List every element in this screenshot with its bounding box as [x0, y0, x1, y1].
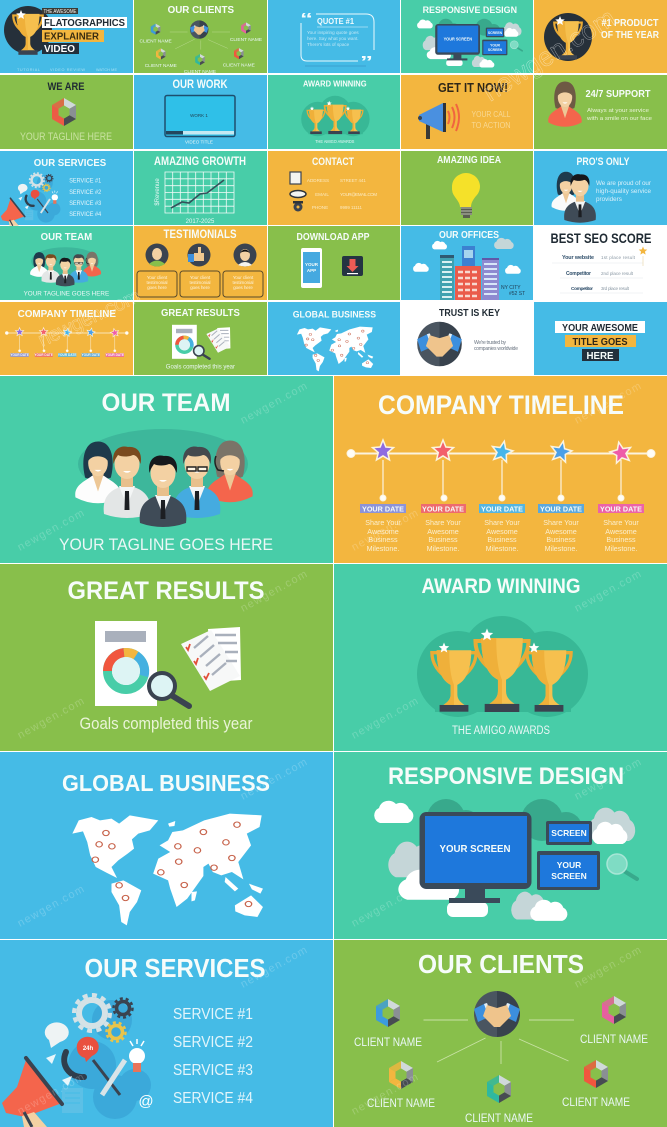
panel: responsive design small: YOUR SCREEN — [444, 36, 472, 41]
values — [340, 178, 377, 210]
values: YOUR@EMAIL.COM — [340, 192, 377, 197]
text: We're trusted by — [474, 340, 506, 346]
testimonial text: Your client — [233, 275, 254, 280]
icon: bulb — [452, 173, 480, 218]
panel: company timeline small — [0, 302, 133, 375]
milestone text: Awesome — [367, 527, 399, 536]
text: high-quality service — [596, 188, 651, 195]
panel: our team — [0, 376, 333, 563]
heading: stacked title labels: VIDEO — [44, 44, 75, 55]
panel: company timeline small: YOUR DATE — [58, 353, 76, 357]
heading: stacked title labels: THE AWESOME — [44, 9, 77, 15]
panel: award winning small: THE AMIGO AWARDS — [315, 139, 354, 144]
results table: 2nd place result — [601, 271, 634, 276]
panel: great results small: GREAT RESULTS — [161, 308, 240, 319]
text: menu captions: VIDEO REVIEW — [50, 68, 85, 72]
address — [501, 285, 525, 297]
label: line one: YOUR AWESOME — [562, 323, 638, 334]
quote marks: “ — [300, 11, 313, 28]
watermarks: newgen.com — [239, 756, 309, 803]
watermarks: newgen.com — [239, 380, 309, 427]
milestone text: Awesome — [545, 527, 577, 536]
heading: AMAZING IDEA — [437, 154, 501, 166]
panel: great results — [0, 564, 333, 751]
illustration: megaphone and tools: @ — [138, 1093, 154, 1110]
milestone text: Business — [487, 535, 517, 544]
panel: responsive design small: SCREEN — [488, 31, 503, 35]
icon: megaphone — [418, 103, 459, 139]
client network diagram — [376, 991, 626, 1103]
closing quote marks: ” — [360, 54, 373, 71]
heading: stacked title labels — [42, 8, 127, 55]
results table: 3rd place result — [601, 286, 630, 291]
panel: our clients — [334, 940, 667, 1127]
world map with pins — [72, 814, 263, 925]
values: STREET 441 — [340, 178, 366, 183]
watermarks: newgen.com — [477, 2, 620, 107]
heading: 24/7 SUPPORT — [586, 88, 651, 100]
caption: VIDEO TITLE — [185, 140, 213, 144]
panel: our services small: SERVICE #1 — [69, 178, 102, 185]
icon: trophy — [544, 13, 592, 61]
heading: GLOBAL BUSINESS — [62, 770, 270, 796]
panel: company timeline — [334, 376, 667, 563]
heading: #1 PRODUCT — [602, 17, 659, 29]
axis label: $Revenue — [155, 178, 161, 206]
milestone text: Milestone. — [605, 544, 637, 553]
text: We are proud of our — [596, 180, 651, 187]
panel: responsive design small: RESPONSIVE DESIGN — [423, 5, 517, 16]
date labels — [362, 504, 642, 514]
panel: our team small: OUR TEAM — [41, 232, 92, 243]
label: line two: TITLE GOES — [572, 337, 628, 348]
illustration: megaphone and tools — [2, 995, 154, 1127]
watermarks: newgen.com — [239, 944, 309, 991]
video frame: WORK 1 — [190, 113, 208, 118]
testimonial text: goes here — [147, 285, 167, 290]
panel: your awesome title — [534, 302, 667, 375]
heading — [601, 17, 659, 41]
caption: Goals completed this year — [80, 714, 253, 733]
milestone text: Share Your — [543, 518, 579, 527]
panel: company timeline small: YOUR DATE — [106, 353, 124, 357]
client names: CLIENT NAME — [562, 1095, 630, 1109]
testimonial text: testimonial — [232, 280, 254, 285]
panel: support — [534, 75, 667, 149]
panel: pros only — [534, 151, 667, 225]
text: quote body — [307, 30, 359, 47]
milestone text: Milestone. — [427, 544, 459, 553]
text: quote body: There's lots of space — [307, 42, 350, 47]
heading: OUR SERVICES — [84, 953, 266, 983]
panel: we are — [0, 75, 133, 149]
heading: OUR TEAM — [102, 389, 230, 417]
testimonial text: goes here — [190, 285, 210, 290]
screen labels — [440, 828, 587, 881]
panel: great results small: Goals completed this year — [166, 363, 236, 370]
panel: award winning — [334, 564, 667, 751]
heading: GREAT RESULTS — [68, 577, 264, 605]
icon: two people — [552, 172, 596, 223]
heading: DOWNLOAD APP — [296, 231, 370, 243]
milestone text: Milestone. — [486, 544, 518, 553]
watermarks: newgen.com — [573, 568, 643, 615]
panel: award winning small — [268, 75, 400, 149]
results table: Competitor — [571, 286, 593, 292]
panel: responsive design small: SCREEN — [488, 48, 503, 52]
text: quote body: Your inspiring quote goes — [307, 30, 359, 35]
values: 9999 11111 — [340, 205, 362, 210]
milestone text: Awesome — [486, 527, 518, 536]
panel: trust is key — [401, 302, 533, 375]
line chart — [165, 172, 234, 213]
heading: PRO'S ONLY — [576, 156, 630, 168]
heading: TRUST IS KEY — [439, 307, 500, 319]
illustration: screens and clouds — [374, 799, 637, 921]
panel: award winning small: AWARD WINNING — [303, 79, 367, 89]
panel: download app — [268, 226, 400, 300]
panel: our clients small: OUR CLIENTS — [168, 5, 234, 16]
testimonial boxes — [137, 271, 263, 297]
heading: OUR OFFICES — [439, 229, 499, 241]
client names: CLIENT NAME — [367, 1096, 435, 1110]
heading: TESTIMONIALS — [164, 229, 237, 241]
panel: our services small: SERVICE #2 — [69, 189, 102, 196]
text — [474, 340, 518, 352]
timeline — [347, 439, 655, 513]
testimonial text: Your client — [147, 275, 168, 280]
illustration: megaphone and tools: 24h — [83, 1046, 94, 1052]
icon: phone — [301, 248, 322, 288]
icon: download app — [342, 256, 363, 276]
milestone text: Share Your — [603, 518, 639, 527]
heading: stacked title labels: EXPLAINER — [44, 32, 100, 42]
results table — [552, 246, 647, 293]
illustration: report and magnifier — [95, 621, 241, 706]
illustration: city — [413, 238, 521, 300]
panel: our services — [0, 940, 333, 1127]
screen labels: SCREEN — [551, 871, 587, 881]
watermarks: newgen.com — [16, 1071, 86, 1118]
panel: contact — [268, 151, 400, 225]
heading: CONTACT — [312, 156, 354, 168]
date labels: YOUR DATE — [422, 504, 464, 514]
date labels: YOUR DATE — [481, 504, 523, 514]
results table: Competitor — [566, 271, 591, 277]
heading: AMAZING GROWTH — [154, 154, 246, 168]
panel: get it now — [401, 75, 533, 149]
service list: SERVICE #4 — [173, 1090, 253, 1107]
panel: our team small: YOUR TAGLINE GOES HERE — [24, 291, 110, 298]
date labels: YOUR DATE — [362, 504, 404, 514]
panel: our services small: SERVICE #4 — [69, 211, 102, 218]
icon: hexagon logo — [52, 98, 76, 126]
panel: our services small: OUR SERVICES — [34, 158, 106, 169]
heading: WE ARE — [48, 81, 84, 93]
client names: CLIENT NAME — [580, 1032, 648, 1046]
text: quote body: here. Say what you want. — [307, 36, 359, 41]
milestone text: Business — [428, 535, 458, 544]
panel: number one product — [534, 0, 667, 73]
heading: AWARD WINNING — [422, 575, 580, 598]
call to action text: YOUR CALL — [472, 109, 511, 119]
milestone text — [365, 518, 639, 553]
milestone text: Share Your — [425, 518, 461, 527]
text: menu captions: WATCH ME — [96, 68, 117, 72]
watermarks: newgen.com — [239, 568, 309, 615]
text — [586, 108, 652, 122]
panel: quote — [268, 0, 400, 73]
call to action text: TO ACTION — [472, 120, 510, 130]
call to action text — [472, 109, 511, 130]
icon: phone: APP — [307, 268, 316, 273]
testimonial text: testimonial — [146, 280, 168, 285]
milestone text: Business — [368, 535, 398, 544]
panel: amazing idea — [401, 151, 533, 225]
milestone text: Awesome — [427, 527, 459, 536]
labels — [307, 178, 329, 210]
screen labels: SCREEN — [551, 828, 587, 838]
text: providers — [596, 196, 622, 203]
heading: GET IT NOW! — [438, 81, 508, 95]
labels: PHONE — [312, 205, 328, 210]
watermarks: newgen.com — [350, 695, 420, 742]
testimonial text — [146, 275, 254, 290]
panel: amazing growth — [134, 151, 267, 225]
watermarks: newgen.com — [16, 883, 86, 930]
watermarks: newgen.com — [350, 507, 420, 554]
address: NY CITY — [501, 285, 521, 291]
milestone text: Share Your — [484, 518, 520, 527]
panel: company timeline small: YOUR DATE — [82, 353, 100, 357]
screen labels: YOUR — [557, 860, 581, 870]
panel: our clients small — [134, 0, 267, 75]
panel: responsive design small — [401, 0, 533, 73]
client names: CLIENT NAME — [354, 1035, 422, 1049]
watermarks: newgen.com — [350, 883, 420, 930]
milestone text: Business — [606, 535, 636, 544]
testimonial text: Your client — [190, 275, 211, 280]
text: menu captions: TUTORIAL — [17, 68, 40, 72]
panel: best seo score — [534, 226, 667, 300]
service list: SERVICE #2 — [173, 1034, 253, 1051]
illustration: team — [75, 429, 253, 527]
panel: our work — [134, 75, 267, 149]
panel: global business small — [268, 302, 400, 375]
icon: phone: YOUR — [305, 262, 319, 267]
icon: trophy on dark circle — [4, 6, 52, 55]
watermarks: newgen.com — [573, 756, 643, 803]
watermarks: newgen.com — [35, 285, 144, 352]
watermarks: newgen.com — [16, 507, 86, 554]
icons — [290, 172, 306, 212]
labels: EMAIL — [315, 192, 329, 197]
service list — [173, 1006, 253, 1107]
heading: COMPANY TIMELINE — [378, 390, 624, 420]
client names — [354, 1032, 648, 1125]
results table: Your website — [562, 255, 594, 261]
quote frame — [301, 14, 374, 61]
panel: great results small — [134, 302, 267, 375]
label: line three: HERE — [586, 351, 614, 362]
panel: our team small — [0, 226, 133, 300]
panel: company timeline small: YOUR DATE — [34, 353, 53, 357]
milestone text: Share Your — [365, 518, 401, 527]
text — [596, 180, 651, 203]
text: Always at your service — [587, 108, 649, 114]
date labels: YOUR DATE — [600, 504, 642, 514]
milestone text: Milestone. — [367, 544, 399, 553]
testimonial text: goes here — [233, 285, 253, 290]
panel: our clients small: CLIENT NAME — [230, 37, 262, 43]
panel: company timeline small: COMPANY TIMELINE — [18, 309, 116, 320]
icon: agent — [548, 81, 582, 127]
milestone text: Milestone. — [545, 544, 577, 553]
watermarks: newgen.com — [573, 380, 643, 427]
panel: our clients small: CLIENT NAME — [145, 63, 177, 69]
panel: our clients small: CLIENT NAME — [140, 38, 172, 44]
panel: flatographics explainer video — [0, 0, 133, 73]
service list: SERVICE #3 — [173, 1062, 253, 1079]
milestone text: Business — [546, 535, 576, 544]
avatars — [146, 244, 256, 266]
heading: stacked title labels: FLATOGRAPHICS — [44, 18, 125, 29]
panel: responsive design — [334, 752, 667, 939]
milestone text: Awesome — [605, 527, 637, 536]
panel: testimonials — [134, 226, 267, 300]
panel: our clients small: CLIENT NAME — [184, 69, 216, 75]
service list: SERVICE #1 — [173, 1006, 253, 1023]
panel: our services small — [0, 151, 133, 226]
icon: handshake — [417, 322, 462, 366]
date labels: YOUR DATE — [540, 504, 582, 514]
testimonial text: testimonial — [190, 280, 211, 285]
panel: responsive design small: YOUR — [490, 43, 500, 47]
results table: 1st place result — [601, 255, 636, 260]
illustration: trophies — [417, 616, 588, 717]
tagline: YOUR TAGLINE GOES HERE — [59, 535, 273, 554]
client names: CLIENT NAME — [465, 1111, 533, 1125]
tagline: YOUR TAGLINE HERE — [20, 131, 112, 143]
watermarks: newgen.com — [573, 944, 643, 991]
panel: global business small: GLOBAL BUSINESS — [293, 310, 376, 320]
caption: THE AMIGO AWARDS — [452, 725, 550, 737]
panel: our services small: SERVICE #3 — [69, 200, 102, 207]
text: companies worldwide — [474, 346, 518, 352]
panel: our offices — [401, 226, 533, 300]
labels: ADDRESS — [307, 178, 329, 183]
text: menu captions — [17, 68, 117, 72]
heading: OUR CLIENTS — [418, 949, 584, 979]
address: #52 ST — [509, 291, 525, 297]
panel: our clients small: CLIENT NAME — [223, 62, 255, 68]
heading: RESPONSIVE DESIGN — [388, 763, 624, 790]
panel: global business — [0, 752, 333, 939]
axis dates: 2017-2025 — [186, 219, 215, 225]
watermarks: newgen.com — [350, 1071, 420, 1118]
screen labels: YOUR SCREEN — [440, 843, 510, 855]
watermarks: newgen.com — [16, 695, 86, 742]
panel: company timeline small: YOUR DATE — [10, 353, 29, 357]
heading: OUR WORK — [172, 77, 228, 91]
text: with a smile on our face — [586, 116, 652, 122]
heading: quote: QUOTE #1 — [317, 17, 355, 26]
